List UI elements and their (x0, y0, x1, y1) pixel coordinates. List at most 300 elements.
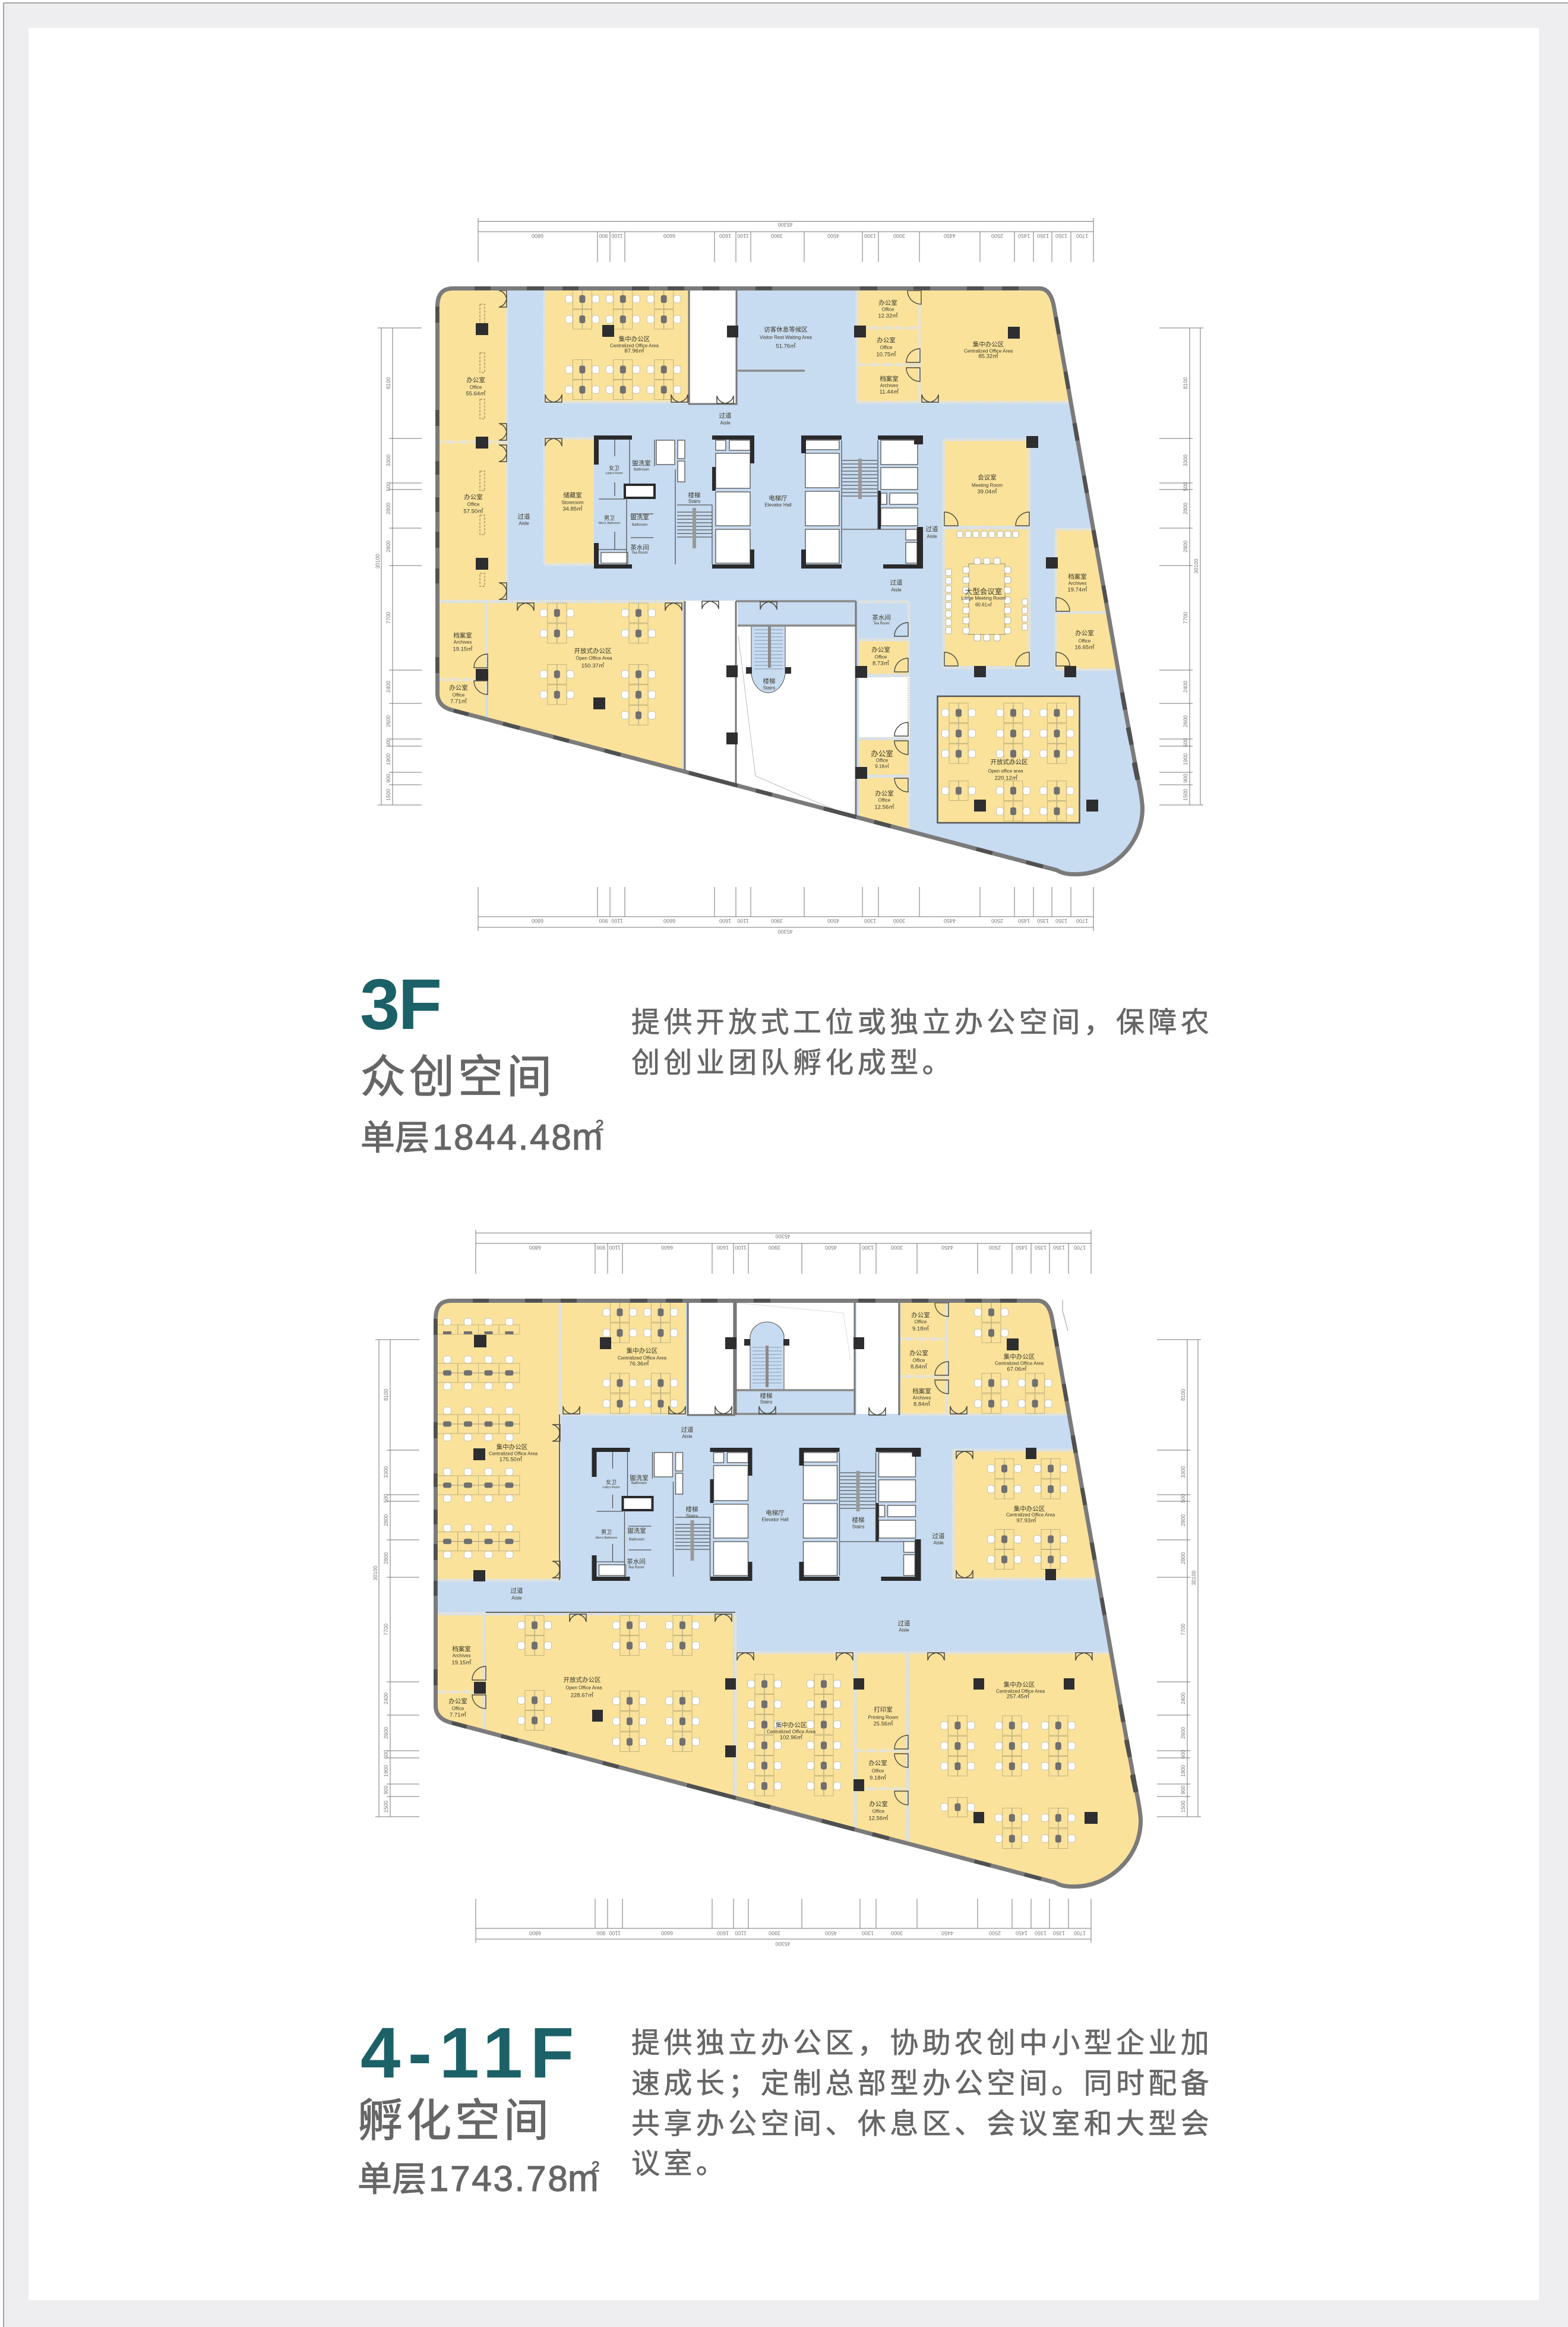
dimension lines 3F: 6600 (663, 918, 675, 924)
dimension lines 3F: 1700 (1076, 918, 1088, 924)
label: office 7.71: 办公室 (449, 684, 468, 692)
label: visitor waiting: Visitor Rest Waiting Area (760, 335, 813, 340)
dimension lines 4-11F: 900 (1180, 1785, 1186, 1795)
label: office 7.71 (449, 684, 468, 705)
label: core rooms: 盥洗室 (630, 513, 649, 521)
label: archives 19.74: 档案室 (1068, 573, 1087, 580)
label: archives 19.15 (453, 632, 473, 652)
label: core rooms: 女卫 (606, 1479, 617, 1485)
dimension lines 3F: 4450 (944, 918, 956, 924)
dimension lines 4-11F: 1450 (1016, 1930, 1028, 1936)
label: centralized 76.36: Centralized Office Area (618, 1356, 667, 1360)
dimension lines 4-11F: 1100 (735, 1245, 747, 1251)
dimension lines 3F: 1300 (864, 233, 876, 239)
label: office 57.50: 57.50㎡ (463, 509, 483, 514)
label: office 7.71: 7.71㎡ (450, 1712, 466, 1718)
label: archives 11.44: 档案室 (880, 375, 899, 383)
dimension lines 3F: 2600 (385, 715, 391, 727)
label: office 16.65: 16.65㎡ (1074, 644, 1095, 651)
label: archives 19.15 (451, 1645, 472, 1666)
label: office 7.71: 办公室 (448, 1697, 467, 1705)
dimension lines 4-11F: 2800 (1180, 1552, 1186, 1564)
label: office 8.73: Office (875, 655, 887, 659)
label: centralized 67.06: 集中办公区 (1004, 1353, 1035, 1360)
label: aisle top: 过道 (719, 412, 732, 419)
dimension lines 3F: 3900 (771, 918, 783, 924)
label: office 8.84 (909, 1349, 928, 1370)
label: core rooms: Stairs (688, 499, 700, 504)
label: printing room: 25.56㎡ (873, 1720, 893, 1728)
dimension lines 4-11F: 1350 (1053, 1930, 1065, 1936)
area: 单层1743.78㎡: 2 (592, 2159, 599, 2175)
label: aisle left: 过道 (511, 1587, 523, 1595)
area: 单层1743.78㎡: 单层 (358, 2160, 426, 2199)
label: centralized 257.45: Centralized Office Area (996, 1688, 1045, 1694)
label: office 9.18: 办公室 (911, 1311, 930, 1319)
label: core rooms: 茶水间 (630, 544, 649, 551)
dimension lines 4-11F: 2600 (383, 1727, 389, 1739)
label: aisle left: Aisle (511, 1596, 522, 1600)
description: 4-11F (631, 2028, 1213, 2180)
label: core rooms: 楼梯 (852, 1516, 865, 1524)
label: aisle left (518, 513, 530, 526)
label: office 55.64: Office (470, 385, 482, 390)
label: office 57.50: Office (467, 501, 480, 507)
dimension lines 3F: 2400 (385, 681, 391, 693)
label: archives 19.15: Archives (454, 639, 472, 645)
dimension lines 4-11F: 3900 (769, 1245, 780, 1251)
structural columns 4-11F (473, 1335, 1098, 1824)
dimension lines 4-11F: 1350 (1035, 1930, 1047, 1936)
label: centralized 102.96: Centralized Office Area (767, 1729, 816, 1735)
label: core rooms: Bathroom (634, 468, 649, 472)
label: open office 150.37: 150.37㎡ (581, 663, 605, 669)
desks: open office 220.12 (942, 703, 1074, 821)
dimension lines 4-11F: 30100 (372, 1565, 378, 1581)
label: printing room: Printing Room (868, 1715, 899, 1720)
label: centralized 87.96 (610, 335, 659, 354)
label: aisle center: Aisle (899, 1628, 909, 1633)
dimension lines 3F: 1600 (719, 918, 731, 924)
label: centralized 97.93: Centralized Office Area (1006, 1513, 1055, 1517)
label: archives 8.84: 8.84㎡ (913, 1401, 930, 1408)
dimension lines 3F: 500 (385, 482, 391, 491)
label: office 8.73 (871, 646, 890, 667)
label: core rooms: 盥洗室 (627, 1527, 646, 1535)
label: tea room (872, 614, 891, 626)
dimension lines 4-11F: 7700 (1180, 1624, 1186, 1635)
dimension lines 3F: 1450 (1018, 918, 1030, 924)
dimension lines 3F: 2600 (1183, 715, 1188, 727)
dimension lines 4-11F: 500 (383, 1494, 389, 1503)
dimension lines 4-11F: 1100 (735, 1930, 747, 1936)
label: archives 11.44: 11.44㎡ (880, 389, 899, 396)
label: meeting room: 39.04㎡ (977, 488, 997, 495)
label: large meeting room: 60.61㎡ (975, 602, 992, 607)
dimension lines 4-11F: 1300 (862, 1245, 874, 1251)
label: aisle left: Aisle (519, 520, 529, 526)
label: centralized 102.96: 102.96㎡ (780, 1735, 803, 1741)
label: office 7.71: Office (452, 1706, 464, 1711)
label: archives 8.84: Archives (913, 1395, 931, 1401)
label: archives 8.84 (912, 1387, 931, 1408)
label: centralized 87.96: 集中办公区 (619, 335, 650, 343)
dimension lines 4-11F: 2500 (989, 1930, 1001, 1936)
desks: centralized 102.96 (747, 1674, 841, 1796)
description: 4-11F: 共享办公空间、休息区、会议室和大型会 (631, 2108, 1213, 2140)
label: core rooms: Lady's Room (605, 472, 623, 475)
label: office 16.65: Office (1079, 638, 1091, 644)
label: archives 19.15: 档案室 (453, 632, 472, 639)
label: centralized 257.45 (996, 1681, 1045, 1700)
label: office 12.56: Office (872, 1808, 885, 1814)
label: office 10.75: Office (880, 345, 893, 351)
dimension lines 3F: 2500 (991, 918, 1003, 924)
label: office 12.32: 12.32㎡ (878, 312, 898, 320)
label: centralized 67.06: Centralized Office Area (995, 1360, 1044, 1366)
dimension lines 4-11F: 2800 (1180, 1514, 1186, 1526)
dimension lines 4-11F: 6800 (529, 1245, 541, 1251)
label: core rooms: 男卫 (604, 515, 615, 521)
label: stairs atrium (760, 1392, 772, 1404)
area: 单层1844.48㎡: m (572, 1117, 603, 1158)
doors 4-11F (472, 1303, 1092, 1805)
label: elevator hall (764, 494, 792, 507)
label: aisle right (932, 1532, 945, 1546)
dimension lines 3F: 4500 (827, 233, 839, 239)
label: office 55.64: 办公室 (466, 376, 485, 384)
dimension lines 4-11F: 4500 (825, 1930, 837, 1936)
label: centralized 257.45: 集中办公区 (1004, 1681, 1035, 1688)
label: centralized 175.50 (489, 1443, 538, 1463)
label: office 8.84: 办公室 (909, 1349, 928, 1357)
dimension lines 3F: 3300 (385, 454, 391, 466)
dimension lines 3F: 7700 (1183, 612, 1188, 624)
desks: centralized 76.36 (603, 1302, 678, 1413)
label: open office 220.12: 220.12㎡ (995, 775, 1018, 782)
label: core rooms: Bathroom (632, 523, 647, 527)
desks: open office 228.67 (518, 1615, 700, 1751)
label: archives 19.15: 档案室 (452, 1645, 471, 1653)
label: office 55.64: 55.64㎡ (466, 391, 486, 397)
label: centralized 87.96: Centralized Office Area (610, 343, 659, 348)
label: stairs atrium: Stairs (760, 1400, 772, 1404)
description: 4-11F: 议室。 (631, 2148, 728, 2180)
label: centralized 85.32: 集中办公区 (973, 340, 1004, 348)
dimension lines 3F: 3000 (893, 233, 905, 239)
label: office 9.18 lower: 办公室 (868, 1759, 887, 1767)
dimension lines 4-11F: 1700 (1074, 1930, 1086, 1936)
dimension lines 4-11F: 1900 (1180, 1765, 1186, 1777)
dimension lines 3F: 600 (1183, 738, 1188, 747)
label: core rooms: 楼梯 (685, 1505, 698, 1513)
dimension lines 3F: 2800 (1183, 503, 1188, 514)
dimension lines 3F: 1100 (611, 233, 623, 239)
label: core rooms: Tea Room (628, 1566, 644, 1570)
room labels 3F (449, 299, 1095, 810)
label: office 12.56: 12.56㎡ (868, 1815, 889, 1821)
description: 3F (631, 1007, 1213, 1079)
label: open office 228.67: 开放式办公区 (563, 1676, 601, 1684)
area: 单层1844.48㎡: 2 (596, 1117, 603, 1133)
room labels 4-11F (448, 1311, 1055, 1821)
desks: centralized 67.06 (974, 1302, 1052, 1413)
label: office 9.18: Office (876, 758, 889, 763)
label: office 12.56: 办公室 (875, 790, 894, 797)
label: office 8.73: 办公室 (871, 646, 890, 653)
label: office 12.32: Office (882, 307, 894, 312)
dimension lines 4-11F: 2600 (1180, 1727, 1186, 1739)
dimension lines 4-11F: 1450 (1016, 1245, 1028, 1251)
dimension lines 3F: 900 (599, 918, 608, 924)
dimension lines 3F: 1450 (1018, 233, 1030, 239)
label: open office 150.37: 开放式办公区 (574, 647, 612, 655)
label: centralized 175.50: Centralized Office Area (489, 1451, 538, 1457)
dimension lines 4-11F: 2400 (383, 1693, 389, 1704)
label: atrium stairs (763, 677, 776, 690)
label: office 16.65: 办公室 (1075, 629, 1094, 637)
label: core rooms: Lady's Room (602, 1486, 620, 1489)
heading: 孵化空间: 孵化空间 (358, 2096, 552, 2146)
floor plate 3F: rooms, walls, desks (428, 279, 1152, 885)
label: aisle right: 过道 (932, 1532, 945, 1540)
dimension lines 3F (375, 218, 1203, 934)
label: tea room: Tea Room (873, 622, 890, 626)
label: meeting room: 会议室 (978, 473, 997, 481)
label: core rooms: 女卫 (609, 465, 619, 471)
dimension lines 4-11F: 900 (383, 1785, 389, 1795)
label: core rooms: Stairs (686, 1514, 698, 1518)
label: storeroom: 储藏室 (563, 491, 582, 499)
label: office 9.18 (871, 749, 893, 769)
label: centralized 67.06 (995, 1353, 1044, 1372)
dimension lines 4-11F: 6600 (661, 1930, 673, 1936)
dimension lines 4-11F: 900 (596, 1930, 606, 1936)
dimension lines 4-11F: 2500 (989, 1245, 1001, 1251)
dimension lines 3F: 900 (599, 233, 608, 239)
label: open office 228.67: 228.67㎡ (571, 1692, 594, 1699)
dimension lines 3F: 1900 (1183, 753, 1188, 765)
label: aisle lower: 过道 (890, 579, 903, 586)
label: archives 19.15: 19.15㎡ (451, 1660, 472, 1666)
dimension lines 4-11F: 45300 (775, 1941, 791, 1947)
label: large meeting room (962, 587, 1006, 607)
dimension lines 3F: 45300 (777, 222, 793, 228)
label: office 57.50 (463, 493, 483, 514)
dimension lines 4-11F: 4500 (825, 1245, 837, 1251)
label: centralized 97.93 (1006, 1505, 1055, 1524)
label: office 12.56: 12.56㎡ (874, 804, 894, 810)
label: office 12.56 (868, 1800, 889, 1821)
label: core rooms: 楼梯 (688, 491, 701, 499)
dimension lines 3F: 8100 (1183, 377, 1188, 389)
dimension lines 3F: 3000 (893, 918, 905, 924)
dimension lines 3F: 1700 (1076, 233, 1088, 239)
dimension lines 3F: 3300 (1183, 454, 1188, 466)
label: office 7.71 (448, 1697, 467, 1718)
label: core rooms: 盥洗室 (630, 1474, 649, 1482)
dimension lines 4-11F: 600 (1180, 1750, 1186, 1759)
label: aisle center (898, 1619, 911, 1633)
label: aisle center: 过道 (898, 1619, 911, 1627)
label: office 10.75 (876, 336, 896, 358)
label: centralized 97.93: 集中办公区 (1014, 1505, 1045, 1513)
dimension lines 4-11F: 30100 (1191, 1570, 1197, 1586)
label: tea room: 茶水间 (872, 614, 891, 621)
label: centralized 257.45: 257.45㎡ (1007, 1693, 1030, 1700)
label: open office 220.12 (988, 758, 1028, 782)
label: aisle right (925, 525, 938, 539)
label: centralized 76.36 (618, 1347, 667, 1368)
label: aisle left: 过道 (518, 513, 530, 520)
panel: 3F floor plan (375, 218, 1203, 934)
dimension lines 3F: 6800 (532, 918, 543, 924)
label: elevator hall: Elevator Hall (764, 503, 792, 507)
label: aisle top: 过道 (681, 1426, 694, 1434)
label: office 12.56: 办公室 (869, 1800, 888, 1808)
label: centralized 102.96: 集中办公区 (776, 1721, 807, 1729)
dimension lines 4-11F: 1100 (609, 1930, 621, 1936)
dimension lines 3F: 600 (385, 738, 391, 747)
label: office 9.18 lower: 9.18㎡ (870, 1775, 886, 1781)
label: centralized 67.06: 67.06㎡ (1007, 1366, 1027, 1372)
label: centralized 175.50: 175.50㎡ (500, 1457, 523, 1463)
dimension lines 3F: 2400 (1183, 681, 1188, 693)
dimension lines 4-11F: 3300 (1180, 1466, 1186, 1478)
dimension lines 4-11F: 2400 (1180, 1693, 1186, 1704)
dimension lines 3F: 1600 (719, 233, 731, 239)
label: visitor waiting (760, 326, 813, 349)
exterior wall outline 3F (435, 286, 1145, 876)
dimension lines 3F: 6800 (532, 233, 543, 239)
area: 单层1743.78㎡: 1743.78 (429, 2159, 569, 2199)
desks: centralized 257.45 (941, 1716, 1075, 1849)
label: core rooms: 男卫 (601, 1529, 612, 1535)
label: office 12.56: Office (878, 797, 891, 803)
label: elevator hall (761, 1509, 789, 1522)
label: core rooms (599, 459, 701, 555)
label: office 9.18: 9.18㎡ (912, 1326, 929, 1332)
label: aisle top: Aisle (720, 421, 731, 425)
dimension lines 4-11F: 1300 (862, 1930, 874, 1936)
dimension lines 3F: 1100 (737, 233, 749, 239)
dimension lines 4-11F: 1700 (1074, 1245, 1086, 1251)
label: storeroom (561, 491, 584, 512)
dimension lines 4-11F: 3000 (891, 1245, 903, 1251)
dimension lines 4-11F: 1350 (1035, 1245, 1047, 1251)
label: visitor waiting: 51.76㎡ (776, 343, 796, 349)
label: office 12.56 (874, 790, 894, 810)
label: core rooms: Bathroom (629, 1538, 644, 1542)
label: aisle right: 过道 (925, 525, 938, 533)
heading: 众创空间: 众创空间 (361, 1052, 555, 1103)
label: open office 150.37 (574, 647, 612, 669)
dimension lines 3F: 30100 (375, 554, 381, 569)
label: office 9.18 lower (868, 1759, 887, 1781)
label: office 7.71: 7.71㎡ (450, 699, 467, 705)
label: office 10.75: 10.75㎡ (876, 352, 896, 358)
label: elevator hall: 电梯厅 (769, 494, 788, 502)
label: office 9.18: 9.18㎡ (875, 764, 889, 769)
dimension lines 4-11F: 45300 (775, 1233, 791, 1239)
exterior wall outline 4-11F (434, 1299, 1143, 1889)
label: open office 150.37: Open Office Area (576, 656, 612, 661)
heading: 3F: 3F (360, 964, 440, 1044)
dimension lines 3F: 1300 (864, 918, 876, 924)
label: centralized 76.36: 76.36㎡ (629, 1360, 649, 1368)
label: storeroom: 34.85㎡ (562, 506, 583, 512)
north marker line (1063, 1300, 1068, 1331)
dimension lines 4-11F: 1500 (1180, 1801, 1186, 1813)
label: aisle top (719, 412, 732, 425)
label: large meeting room: 大型会议室 (965, 587, 1002, 596)
label: centralized 85.32: Centralized Office Area (964, 348, 1013, 354)
dimension lines 4-11F: 600 (383, 1750, 389, 1759)
label: atrium stairs: Stairs (763, 686, 775, 690)
label: office 12.32: 办公室 (878, 299, 897, 307)
panel: 4-11F floor plan (372, 1230, 1201, 1947)
label: printing room: 打印室 (874, 1706, 893, 1713)
label: office 12.32 (878, 299, 898, 320)
label: elevator hall: Elevator Hall (761, 1517, 789, 1522)
desks: centralized 175.50 (437, 1318, 520, 1558)
dimension lines 4-11F: 2800 (383, 1552, 389, 1564)
label: elevator hall: 电梯厅 (766, 1509, 785, 1517)
label: archives 11.44: Archives (880, 383, 898, 389)
label: centralized 85.32: 85.32㎡ (978, 353, 998, 360)
area: 单层1844.48㎡: 1844.48 (432, 1117, 573, 1157)
dimension lines 3F: 900 (385, 773, 391, 783)
label: core rooms: Bathroom (631, 1482, 647, 1485)
desks: open office 150.37 (540, 603, 656, 725)
dimension lines 3F: 1350 (1055, 918, 1067, 924)
structural columns 3F (476, 323, 1098, 812)
label: archives 19.74: Archives (1068, 581, 1086, 586)
dimension lines 4-11F (372, 1230, 1201, 1947)
label: office 9.18: 办公室 (871, 749, 893, 758)
dimension lines 3F: 500 (1183, 482, 1188, 491)
label: core rooms: Men's Bathroom (596, 1536, 617, 1540)
heading: 4-11F: 4-11F (361, 2012, 581, 2093)
label: centralized 175.50: 集中办公区 (497, 1443, 527, 1451)
label: aisle lower: Aisle (891, 587, 902, 593)
label: office 16.65 (1074, 629, 1095, 651)
dimension lines 3F: 1350 (1037, 918, 1049, 924)
label: office 10.75: 办公室 (877, 336, 896, 344)
desks: centralized 97.93 (987, 1459, 1068, 1570)
label: core rooms: Tea Room (631, 551, 648, 555)
dimension lines 4-11F: 3000 (891, 1930, 903, 1936)
area: 单层1743.78㎡: m (568, 2158, 599, 2199)
core rooms 3F (594, 435, 923, 569)
label: aisle right: Aisle (927, 533, 937, 539)
label: centralized 85.32 (964, 340, 1013, 360)
label: archives 8.84: 档案室 (912, 1387, 931, 1395)
dimension lines 4-11F: 1600 (717, 1930, 729, 1936)
label: office 8.84: Office (913, 1358, 925, 1363)
label: office 9.18 lower: Office (872, 1768, 884, 1774)
label: office 7.71: Office (453, 693, 465, 697)
dimension lines 3F: 1100 (737, 918, 749, 924)
label: archives 19.15: Archives (453, 1653, 470, 1659)
label: open office 228.67: Open Office Area (565, 1685, 602, 1691)
dimension lines 4-11F: 8100 (1180, 1389, 1186, 1401)
dimension lines 4-11F: 3300 (383, 1466, 389, 1478)
label: centralized 97.93: 97.93㎡ (1016, 1517, 1036, 1524)
label: aisle right: Aisle (933, 1540, 944, 1546)
label: archives 19.74: 19.74㎡ (1067, 587, 1088, 593)
area: 单层1844.48㎡ (361, 1117, 603, 1158)
